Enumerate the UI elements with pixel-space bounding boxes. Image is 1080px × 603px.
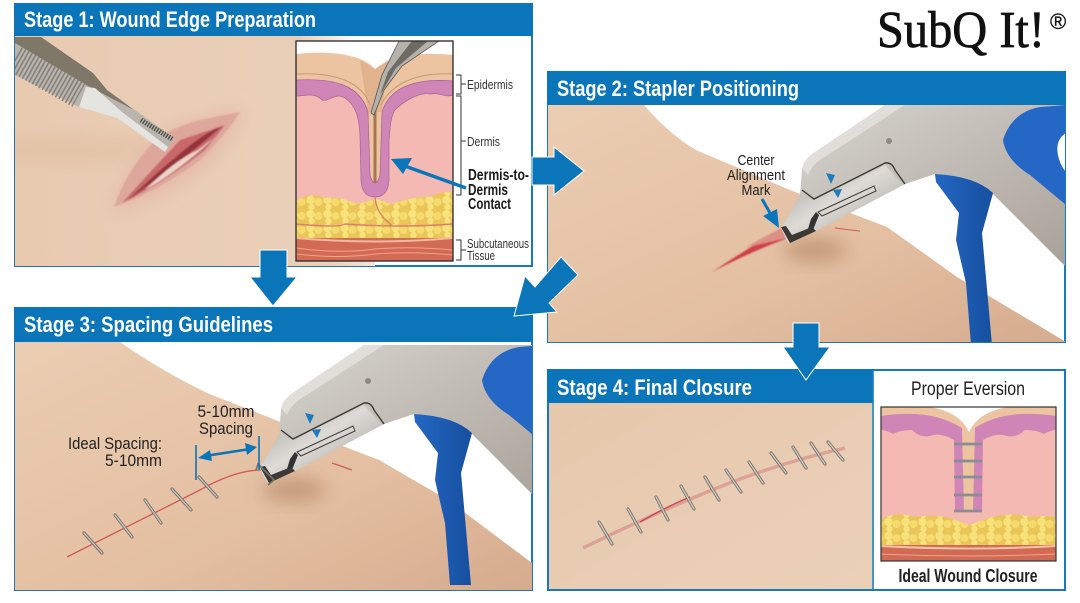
photo: closed wound with staples [549,403,872,589]
photo: arm with stapler [548,105,1066,345]
anatomy labels [456,75,529,263]
arrow: stage 2 to stage 4 [783,323,830,380]
anatomy labels: Dermis [468,182,508,199]
photo: arm with staples and stapler [15,342,545,590]
logo: SubQ It! [877,2,1045,59]
staples [84,477,217,553]
callout: spacing dimension [196,402,259,480]
panel: stage 3 [14,307,545,590]
inset frame [881,407,1056,561]
logo: ® [1050,9,1066,34]
anatomy labels: Dermis-to- [468,167,529,184]
callout: spacing dimension: Spacing [199,419,253,438]
callout: spacing dimension: 5-10mm [198,402,254,421]
arrow: stage 1 to stage 2 [532,147,584,195]
panel heading: Stage 3: Spacing Guidelines [24,312,273,337]
panel: stage 4 [547,369,1065,590]
anatomy labels: Dermis [467,135,500,149]
label: ideal spacing: 5-10mm [105,451,162,470]
callout: center alignment mark: Mark [742,182,771,199]
panel: stage 1 [0,3,533,266]
panel: stage 2 [547,71,1066,345]
arrow: stage 1 to stage 3 [250,250,297,306]
icon: forceps tip [371,41,439,115]
panel heading: Stage 1: Wound Edge Preparation [24,7,316,32]
staples in cross-section [954,444,982,511]
panel heading: Stage 2: Stapler Positioning [557,76,799,101]
panel heading [14,307,533,342]
label: ideal spacing [68,434,162,470]
anatomy labels: Subcutaneous [467,237,529,251]
inset: skin cross-section [296,41,453,261]
icon: forceps [15,37,174,152]
panel heading [547,369,873,403]
panel heading: Stage 4: Final Closure [557,375,752,400]
anatomy labels: Tissue [467,249,495,263]
panel heading [547,71,1066,105]
anatomy labels: Contact [468,196,511,213]
callout: center alignment mark [727,152,786,228]
label: ideal spacing: Ideal Spacing: [68,434,162,453]
anatomy labels: Epidermis [467,78,513,92]
panel heading [14,3,533,36]
arrow: stage 2 to stage 3 [514,257,578,316]
arrow: dermis contact pointer [391,158,466,188]
heading: proper eversion: Proper Eversion [911,379,1025,400]
callout: center alignment mark: Alignment [727,167,786,184]
inset frame [296,41,453,261]
photo: skin with wound [0,36,380,266]
inset: closed skin cross-section [881,407,1056,561]
caption: ideal wound closure: Ideal Wound Closure [898,566,1038,586]
callout: center alignment mark: Center [738,152,774,169]
